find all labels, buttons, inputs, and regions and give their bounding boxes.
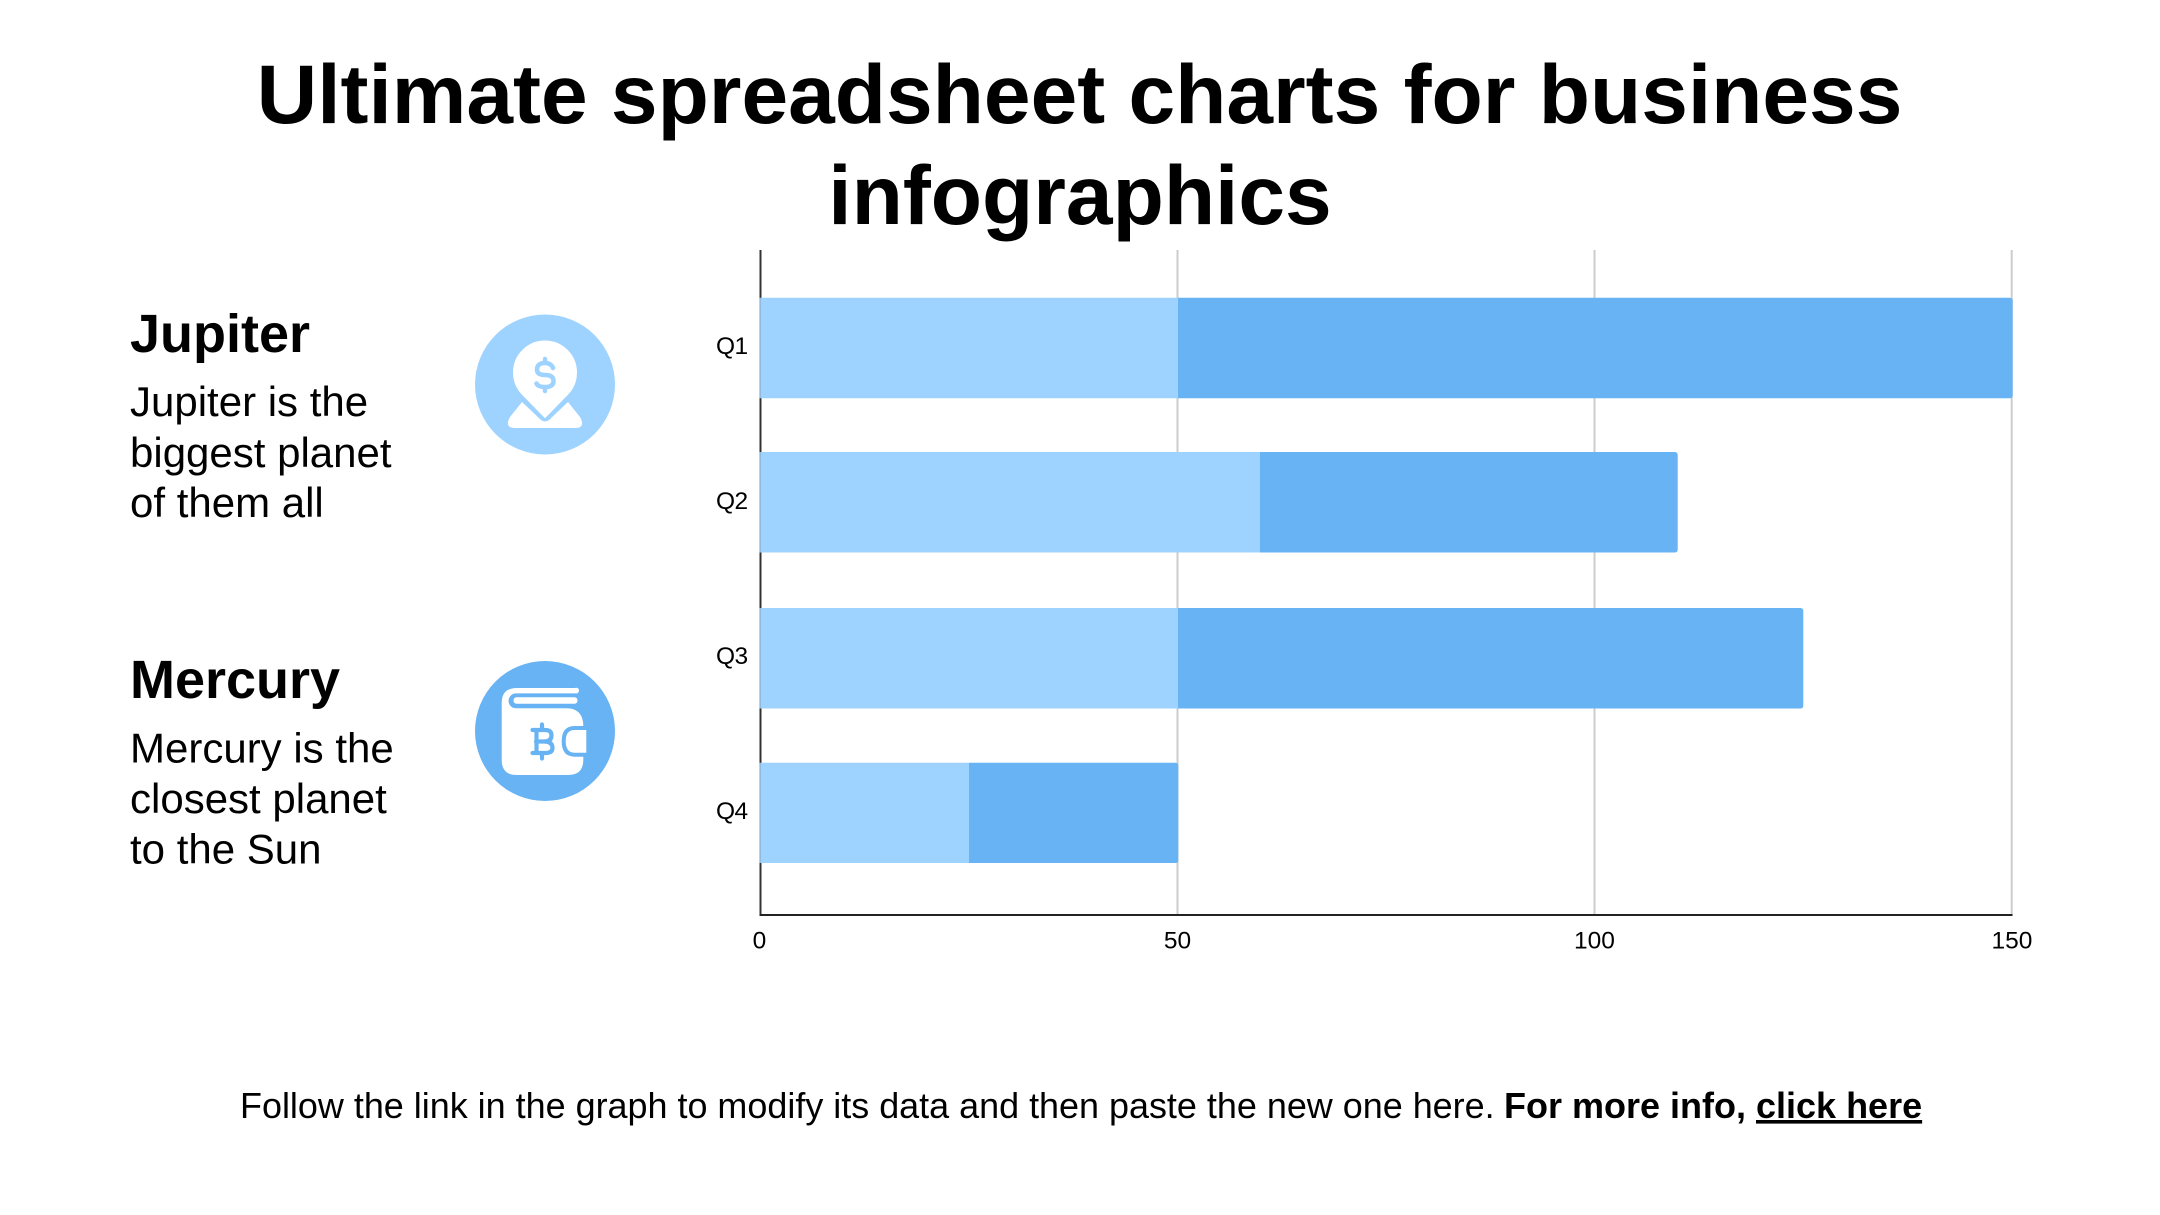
text block: Jupiter: Jupiter xyxy=(130,304,310,364)
text block: Mercury: to the Sun xyxy=(130,826,321,872)
bar: Q2 xyxy=(760,452,1678,552)
category labels: Q2 xyxy=(716,488,748,515)
footer note: Follow the link in the graph to modify its data and then paste the new one here. xyxy=(240,1085,1495,1126)
value axis labels xyxy=(753,928,2032,954)
icon: map pin with dollar xyxy=(475,314,615,454)
bar chart xyxy=(716,250,2032,954)
value axis labels: 100 xyxy=(1574,928,1615,954)
text block: Mercury: Mercury xyxy=(130,650,340,710)
bar: Q3 xyxy=(760,608,1803,708)
value axis labels: 0 xyxy=(753,928,766,954)
category labels: Q4 xyxy=(716,798,748,825)
text block: Mercury xyxy=(130,650,394,872)
category labels xyxy=(716,333,748,825)
value axis labels: 50 xyxy=(1164,928,1191,954)
text block: Mercury: closest planet xyxy=(130,775,387,822)
icon: bitcoin wallet xyxy=(475,661,615,801)
text block: Jupiter: Jupiter is the xyxy=(130,378,368,425)
category labels: Q3 xyxy=(716,643,748,670)
value axis labels: 150 xyxy=(1992,928,2032,954)
category labels: Q1 xyxy=(716,333,748,360)
title: infographics xyxy=(828,148,1332,242)
text block: Jupiter: biggest planet xyxy=(130,429,392,476)
footer note: For more info, click here xyxy=(1504,1085,1922,1126)
text block: Mercury: Mercury is the xyxy=(130,724,394,772)
title: Ultimate spreadsheet charts for business xyxy=(257,47,1902,141)
text block: Jupiter: of them all xyxy=(130,479,324,526)
bar: Q4 xyxy=(760,763,1178,863)
text block: Jupiter xyxy=(130,304,392,526)
bar: Q1 xyxy=(760,298,2013,398)
title xyxy=(257,47,1902,242)
